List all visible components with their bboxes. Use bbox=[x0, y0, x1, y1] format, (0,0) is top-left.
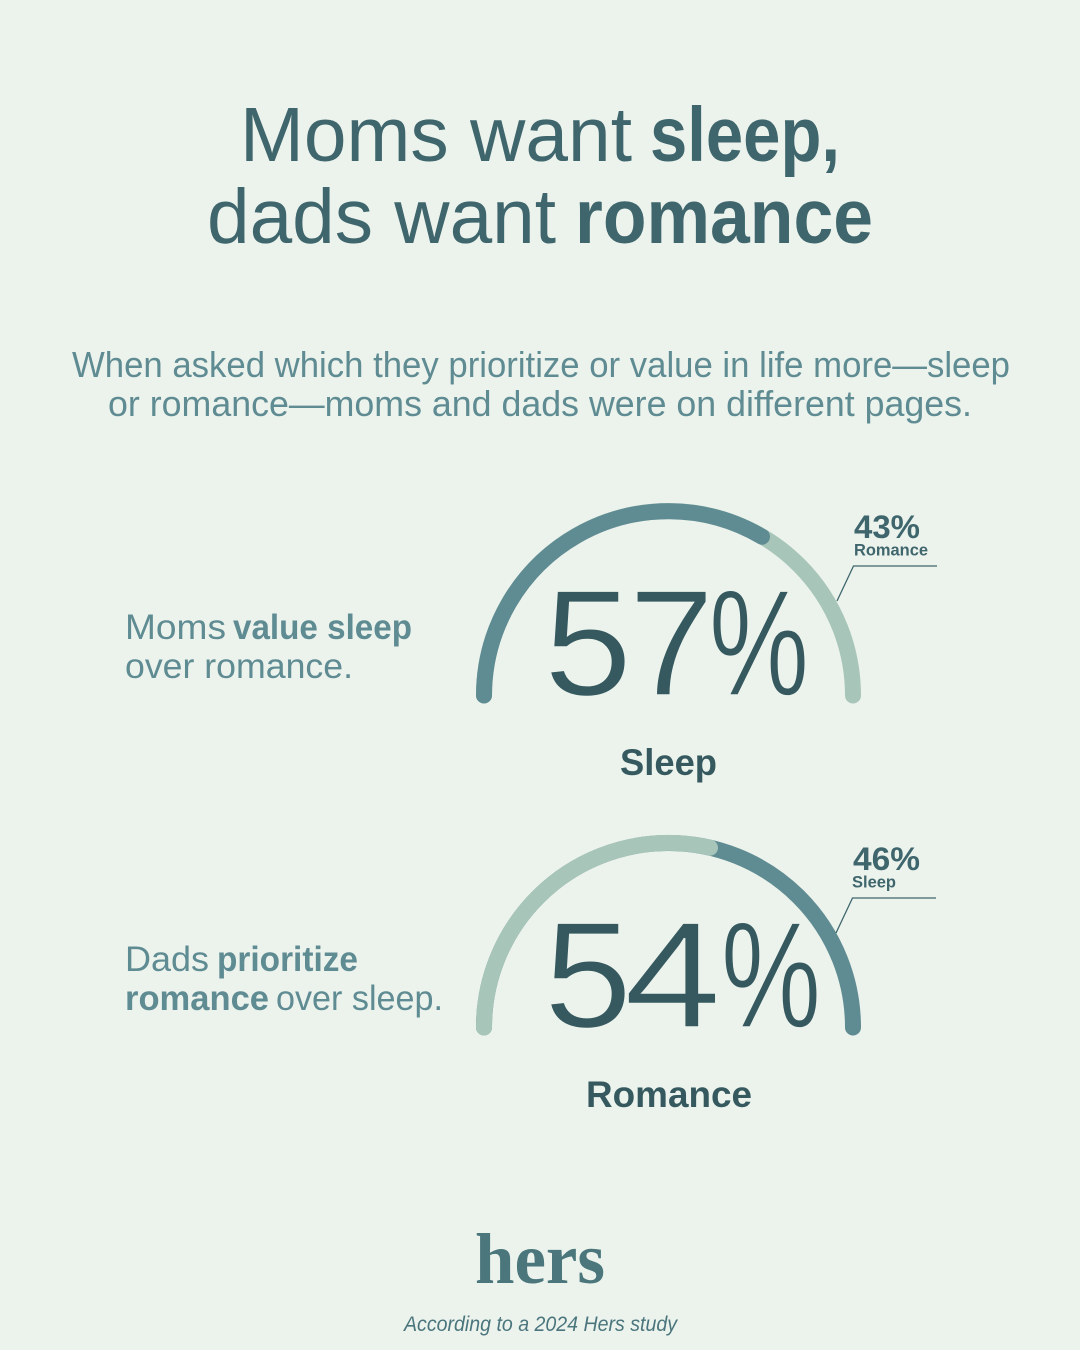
text: moms finding: Moms bbox=[125, 607, 226, 647]
text: dads finding: Dads bbox=[125, 939, 209, 979]
text: dads finding: over sleep. bbox=[276, 978, 443, 1018]
callout: 43% romance bbox=[837, 509, 937, 601]
source note: According to a 2024 Hers study bbox=[402, 1313, 678, 1336]
big value 54%: 5 bbox=[544, 890, 632, 1059]
big value 57%: 7 bbox=[629, 558, 714, 727]
text: dads finding: prioritize bbox=[217, 939, 358, 979]
big value 54%: 4 bbox=[624, 890, 721, 1059]
callout: 46% sleep bbox=[836, 841, 936, 933]
big value 54%: % bbox=[721, 890, 821, 1059]
big value 57%: % bbox=[709, 558, 809, 727]
subtitle bbox=[72, 344, 1010, 424]
gauge arc: romance 43% bbox=[484, 511, 853, 696]
label: romance: Romance bbox=[586, 1074, 752, 1115]
callout: 43% romance: Romance bbox=[854, 542, 928, 560]
title: dads want bbox=[207, 174, 556, 260]
title: romance bbox=[575, 174, 873, 260]
text: moms finding: over romance. bbox=[125, 646, 353, 686]
callout: 46% sleep: Sleep bbox=[852, 874, 896, 892]
gauge arc: sleep 57% bbox=[484, 511, 762, 696]
title bbox=[207, 92, 873, 260]
chart: moms gauge bbox=[484, 509, 937, 783]
gauge arc: sleep 46% bbox=[484, 843, 710, 1028]
text: dads finding bbox=[125, 939, 443, 1018]
label: sleep: Sleep bbox=[620, 742, 717, 783]
title: sleep, bbox=[650, 92, 840, 178]
text: moms finding bbox=[125, 607, 412, 686]
title: Moms want bbox=[240, 92, 632, 178]
logo: hers: hers bbox=[475, 1219, 605, 1299]
subtitle: When asked which they prioritize or value in life more—sleep bbox=[72, 344, 1010, 385]
gauge arc: romance 54% bbox=[484, 843, 853, 1028]
chart: dads gauge bbox=[484, 841, 936, 1115]
callout: 43% romance: 43% bbox=[854, 509, 920, 545]
text: moms finding: value sleep bbox=[233, 607, 412, 647]
text: dads finding: romance bbox=[125, 978, 269, 1018]
callout: 46% sleep: 46% bbox=[853, 841, 920, 877]
subtitle: or romance—moms and dads were on different pages. bbox=[108, 383, 972, 424]
big value 57%: 5 bbox=[544, 558, 632, 727]
